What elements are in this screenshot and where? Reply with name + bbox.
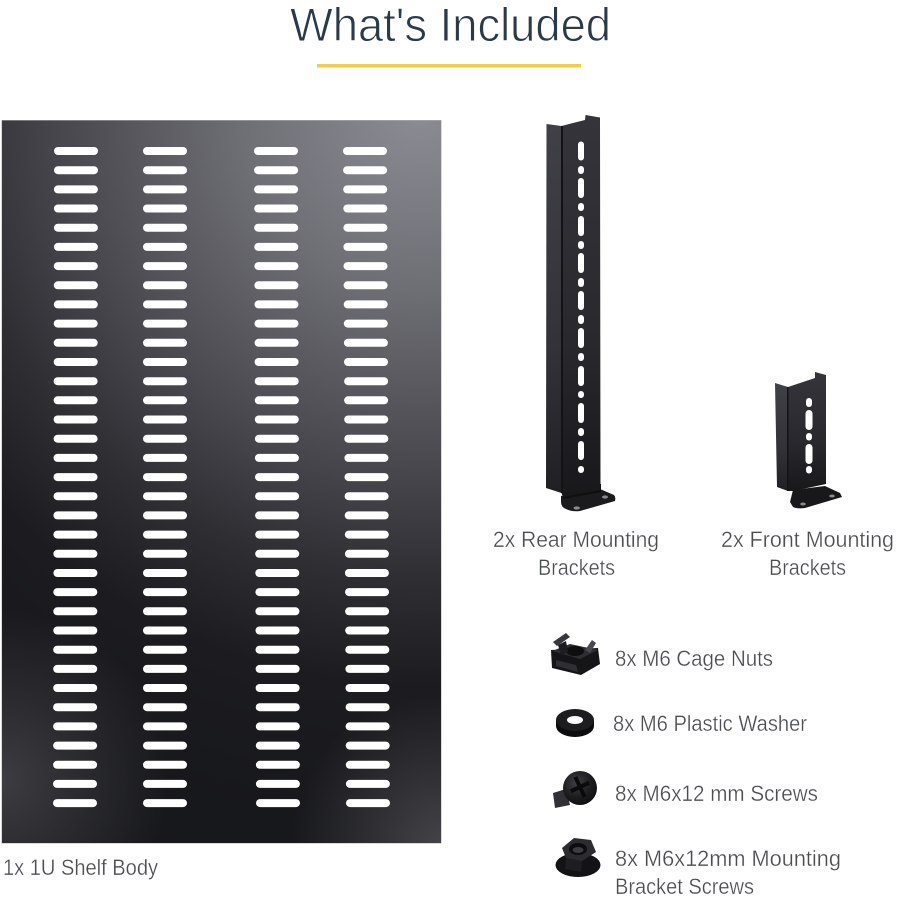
label: rear mounting brackets [493, 527, 659, 580]
label: front mounting brackets [721, 527, 894, 580]
panel: shelf body [2, 120, 442, 844]
label: cage nuts: 8x M6 Cage Nuts [615, 646, 773, 671]
ventilation slots [53, 147, 390, 807]
label: mounting bracket screws: 8x M6x12mm Mounting [615, 846, 841, 871]
icon: plastic washer [556, 709, 594, 737]
icon: cage nut [551, 633, 600, 675]
label: front mounting brackets: 2x Front Mounting [721, 527, 894, 552]
label: shelf body: 1x 1U Shelf Body [3, 855, 158, 880]
title underline [317, 64, 581, 68]
icon: front mounting bracket [775, 372, 842, 508]
label: screws: 8x M6x12 mm Screws [615, 781, 818, 806]
label: mounting bracket screws: Bracket Screws [615, 874, 754, 899]
label: rear mounting brackets: 2x Rear Mounting [493, 527, 659, 552]
label: front mounting brackets: Brackets [769, 555, 846, 580]
icon: flange nut [556, 838, 600, 877]
icon: screw [553, 771, 597, 808]
icon: rear mounting bracket [546, 115, 615, 511]
label: mounting bracket screws [615, 846, 841, 899]
label: rear mounting brackets: Brackets [538, 555, 615, 580]
label: plastic washer: 8x M6 Plastic Washer [613, 711, 807, 736]
